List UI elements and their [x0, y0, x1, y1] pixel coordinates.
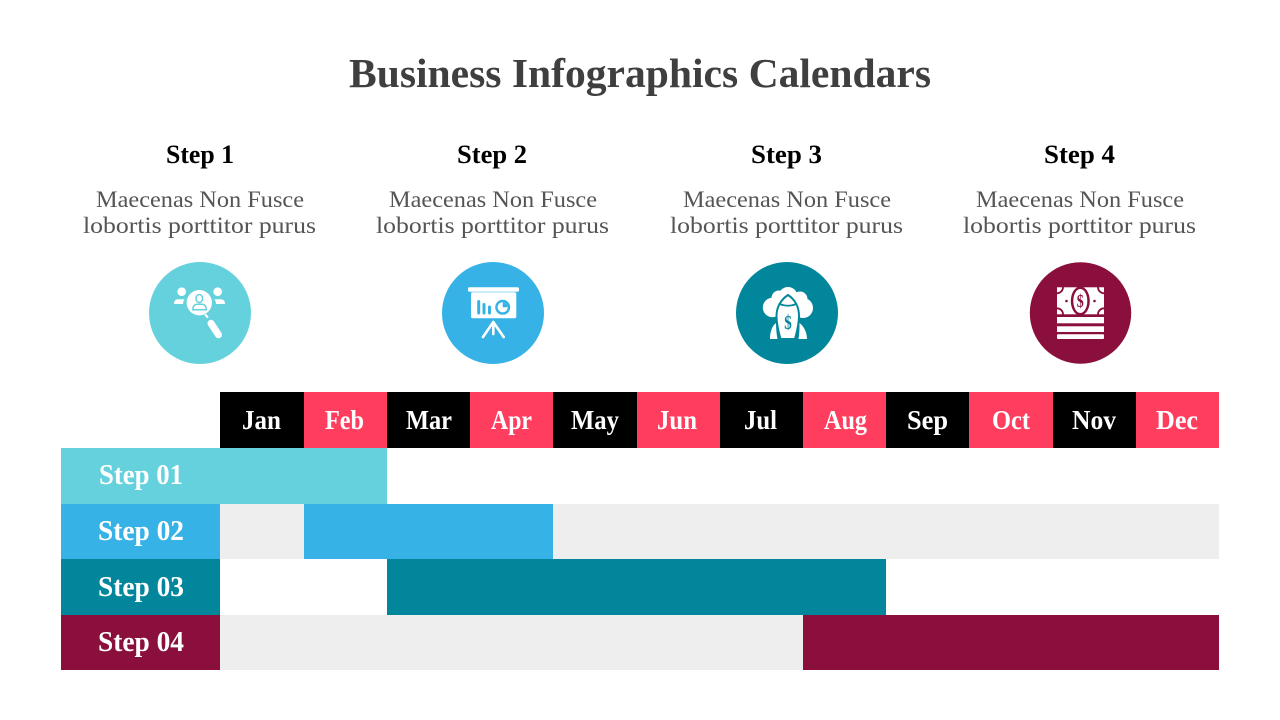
month: Apr	[470, 392, 553, 448]
month: Mar: Mar	[406, 405, 452, 435]
month: Jul: Jul	[744, 405, 777, 435]
month: Jul	[720, 392, 803, 448]
step 3 description	[670, 187, 903, 239]
month: Feb	[304, 392, 387, 448]
row: Step 02: Step 02	[98, 516, 184, 547]
step 3 column	[670, 140, 903, 364]
month: May	[553, 392, 637, 448]
month: Apr: Apr	[491, 405, 532, 435]
month: Jun	[637, 392, 720, 448]
row: Step 04: Step 04	[98, 627, 184, 658]
step 1 description: lobortis porttitor purus	[83, 213, 316, 239]
calendar gantt chart	[61, 392, 1219, 670]
step 1 column	[83, 140, 316, 364]
icon: money stack	[1030, 262, 1131, 364]
step 3 heading: Step 3	[751, 140, 822, 169]
month: Jan	[220, 392, 304, 448]
row: Step 01: Step 01	[99, 460, 183, 491]
row: Step 03: Step 03	[98, 572, 184, 603]
step 2 heading: Step 2	[457, 140, 527, 169]
month: Mar	[387, 392, 470, 448]
icon: rocket and cloud	[736, 262, 838, 364]
step 4 description: lobortis porttitor purus	[963, 213, 1196, 239]
month: Nov	[1053, 392, 1136, 448]
step 3 description: lobortis porttitor purus	[670, 213, 903, 239]
icon: money stack: $	[1077, 291, 1084, 311]
month: Feb: Feb	[325, 405, 364, 435]
month: May: May	[571, 405, 619, 435]
row: Step 04	[61, 615, 1219, 670]
icon: presentation board	[442, 262, 544, 364]
icon: people search magnifier	[149, 262, 251, 364]
month: Nov: Nov	[1072, 405, 1116, 435]
step 2 description: lobortis porttitor purus	[376, 213, 609, 239]
month: Sep: Sep	[907, 405, 948, 435]
row: Step 02	[61, 504, 1219, 559]
row: Step 03	[61, 559, 886, 615]
step 2 description	[376, 187, 609, 239]
month header	[220, 392, 1219, 448]
step 2 description: Maecenas Non Fusce	[389, 187, 597, 213]
row: Step 01	[61, 448, 387, 504]
month: Jan: Jan	[242, 405, 281, 435]
month: Sep	[886, 392, 969, 448]
month: Dec	[1136, 392, 1219, 448]
month: Jun: Jun	[657, 405, 697, 435]
month: Aug	[803, 392, 886, 448]
step 4 column	[963, 140, 1196, 364]
month: Oct: Oct	[992, 405, 1030, 435]
step 1 description	[83, 187, 316, 239]
step 2 column	[376, 140, 609, 364]
month: Oct	[969, 392, 1053, 448]
step 4 heading: Step 4	[1044, 140, 1115, 169]
step 1 heading: Step 1	[166, 140, 234, 169]
step 3 description: Maecenas Non Fusce	[683, 187, 891, 213]
step 4 description	[963, 187, 1196, 239]
step 1 description: Maecenas Non Fusce	[96, 187, 304, 213]
month: Dec: Dec	[1156, 405, 1198, 435]
title: Business Infographics Calendars	[349, 50, 931, 96]
step 4 description: Maecenas Non Fusce	[976, 187, 1184, 213]
icon: rocket and cloud: $	[784, 312, 792, 334]
month: Aug: Aug	[824, 405, 867, 435]
